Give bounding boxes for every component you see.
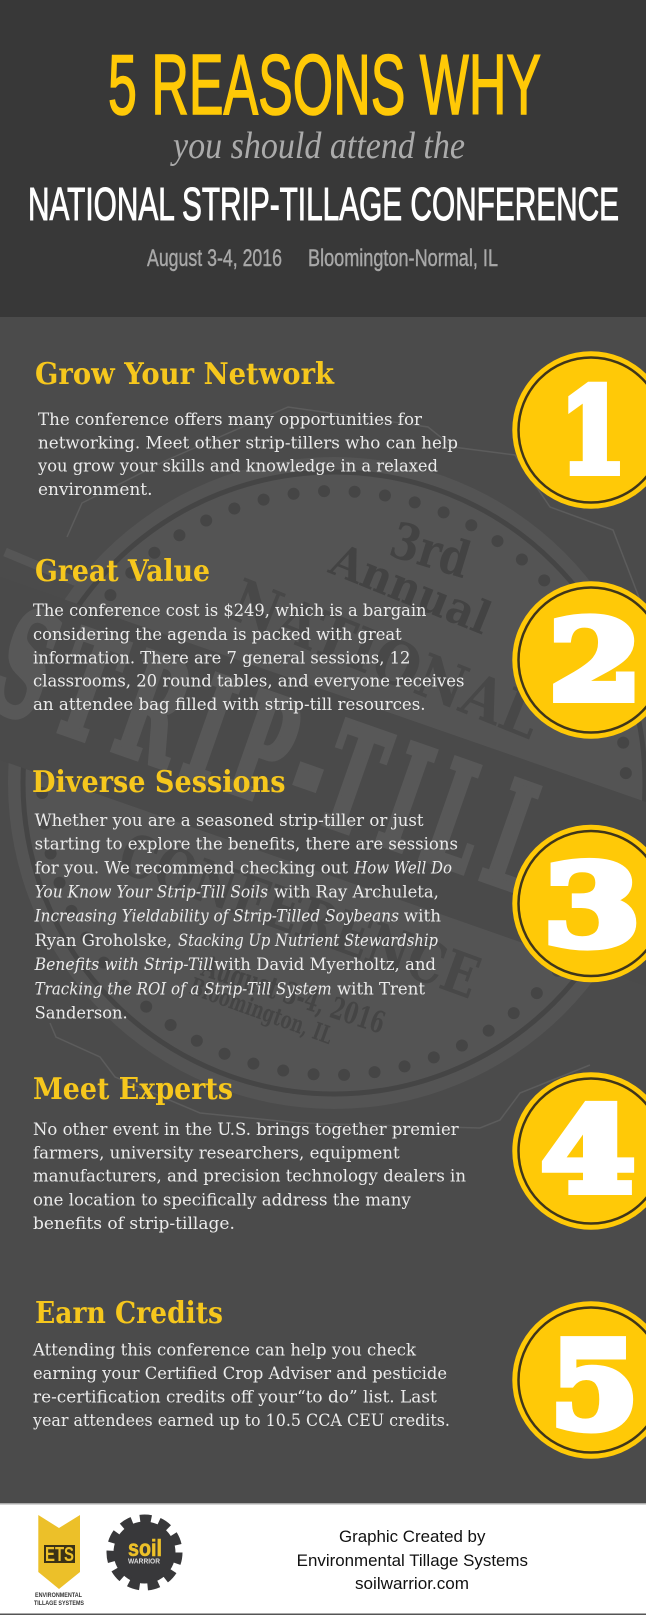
- body 3: Increasing Yieldability of Strip-Tilled Soybeans: [34, 907, 399, 927]
- body 4: manufacturers, and precision technology dealers in: [33, 1167, 466, 1187]
- body 4: [33, 1120, 466, 1234]
- body 1: [37, 410, 458, 500]
- body 3: Stacking Up Nutrient Stewardship: [178, 931, 438, 951]
- number badge 3: [512, 825, 646, 982]
- heading 5: Earn Credits: [35, 1296, 223, 1331]
- body 3: with Trent: [337, 979, 425, 999]
- watermark emblem: 3rd: [383, 510, 477, 590]
- Soil Warrior gear logo: WARRIOR: [128, 1558, 160, 1566]
- credit text: [297, 1528, 528, 1593]
- body 3: Whether you are a seasoned strip-tiller or just: [35, 811, 424, 831]
- body 2: classrooms, 20 round tables, and everyone receives: [33, 672, 464, 692]
- number badge 5: [512, 1301, 646, 1459]
- body 4: one location to specifically address the many: [33, 1191, 411, 1211]
- body 1: networking. Meet other strip-tillers who can help: [38, 433, 458, 453]
- number badge 1: 1: [560, 364, 626, 500]
- body 5: year attendees earned up to 10.5 CCA CEU credits.: [32, 1411, 450, 1431]
- location: Bloomington-Normal, IL: [308, 245, 498, 272]
- reason 5: [32, 1296, 646, 1459]
- body 1: environment.: [38, 480, 152, 500]
- body 3: starting to explore the benefits, there are sessions: [35, 834, 458, 854]
- credit text: Graphic Created by: [339, 1528, 486, 1546]
- credit text: Environmental Tillage Systems: [297, 1552, 528, 1570]
- body 5: [32, 1341, 450, 1431]
- body 3: for you. We recommend checking out: [35, 858, 348, 878]
- body 2: an attendee bag filled with strip-till resources.: [33, 695, 426, 715]
- body 5: earning your Certified Crop Adviser and pesticide: [33, 1364, 447, 1384]
- number badge 4: [512, 1072, 646, 1230]
- number badge 3: 3: [544, 840, 640, 972]
- body 1: you grow your skills and knowledge in a relaxed: [37, 457, 438, 477]
- watermark emblem: [0, 407, 646, 1128]
- watermark emblem: CONFERENCE: [110, 819, 489, 1012]
- watermark emblem: Annual: [322, 533, 499, 645]
- heading 4: Meet Experts: [33, 1072, 233, 1107]
- body 3: [34, 811, 458, 1023]
- Soil Warrior gear logo: soil: [128, 1535, 162, 1561]
- watermark emblem: Bloomington, IL: [186, 971, 337, 1050]
- reason 1: [35, 351, 646, 509]
- reason 2: [33, 554, 646, 739]
- ETS logo: ENVIRONMENTAL: [35, 1592, 82, 1599]
- body 3: Tracking the ROI of a Strip-Till System: [35, 979, 332, 999]
- Soil Warrior gear logo: [112, 1520, 178, 1586]
- body 4: benefits of strip-tillage.: [33, 1214, 235, 1234]
- heading 1: Grow Your Network: [35, 357, 335, 392]
- body 2: [33, 601, 464, 715]
- body 3: You Know Your Strip-Till Soils: [35, 882, 268, 902]
- number badge 5: 5: [550, 1316, 638, 1457]
- subtitle: you should attend the: [169, 125, 465, 167]
- ETS logo: [34, 1515, 85, 1607]
- body 3: How Well Do: [353, 858, 452, 878]
- body 3: Benefits with Strip-Till: [34, 955, 213, 975]
- body 4: No other event in the U.S. brings together premier: [33, 1120, 459, 1140]
- credit text: soilwarrior.com: [355, 1575, 469, 1593]
- body 4: farmers, university researchers, equipment: [33, 1143, 400, 1163]
- reason 3: [32, 765, 646, 1023]
- number badge 4: 4: [541, 1082, 635, 1219]
- body 2: The conference cost is $249, which is a bargain: [33, 601, 427, 621]
- body 3: with Ray Archuleta,: [274, 882, 439, 902]
- heading 2: Great Value: [35, 554, 210, 589]
- heading 3: Diverse Sessions: [32, 765, 286, 800]
- body 3: with David Myerholtz, and: [214, 955, 436, 975]
- number badge 2: 2: [549, 595, 642, 725]
- body 5: Attending this conference can help you check: [32, 1341, 417, 1361]
- watermark emblem: August 3-4, 2016: [197, 949, 389, 1041]
- ETS logo: ETS: [45, 1544, 74, 1566]
- ETS logo: TILLAGE SYSTEMS: [34, 1600, 85, 1607]
- reason 4: [33, 1072, 646, 1234]
- date: August 3-4, 2016: [147, 245, 282, 272]
- body 2: considering the agenda is packed with great: [33, 625, 402, 645]
- watermark emblem: NATIONAL: [220, 566, 551, 754]
- number badge 1: [512, 351, 646, 509]
- footer panel: [0, 1503, 646, 1615]
- number badge 2: [512, 581, 646, 739]
- body 3: Ryan Groholske,: [35, 931, 172, 951]
- header band: [0, 0, 646, 317]
- body 3: with: [404, 907, 441, 927]
- body 1: The conference offers many opportunities for: [38, 410, 423, 430]
- body 5: re-certification credits off your“to do” list. Last: [33, 1388, 437, 1408]
- body 2: information. There are 7 general sessions, 12: [33, 648, 410, 668]
- body 3: Sanderson.: [35, 1003, 128, 1023]
